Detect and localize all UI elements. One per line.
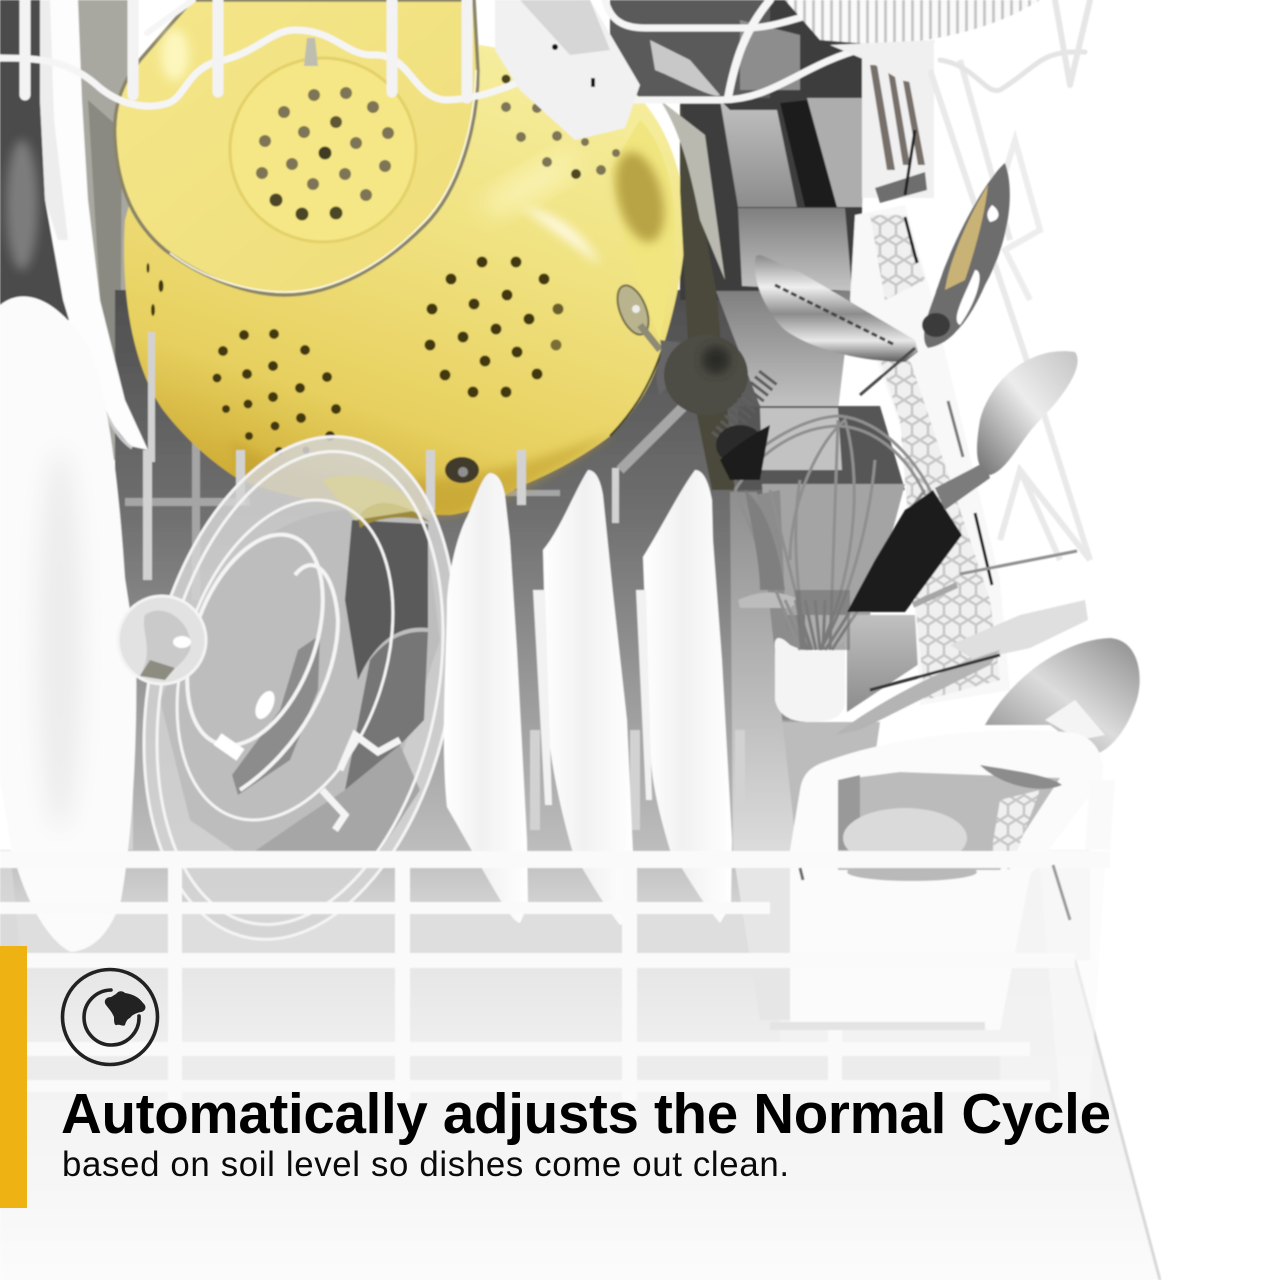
upper rack wavy wire (0, 30, 865, 106)
upper rack wires (0, 0, 1090, 106)
rack tines (125, 332, 745, 850)
dark cabinet interior (0, 0, 130, 460)
top right colander holes (501, 74, 620, 179)
upper rack right-hand wire (940, 52, 1085, 91)
basket top tines (785, 0, 1040, 85)
lid knob (118, 596, 206, 684)
upper rack vertical tines (25, 0, 585, 98)
ladle spoon (977, 351, 1078, 475)
rack floor (115, 290, 805, 851)
floor grid (125, 430, 560, 600)
spatula with black handle (720, 425, 990, 612)
slotted serving spoon (985, 638, 1140, 755)
tongs and flat utensils (835, 551, 1088, 735)
upper rack block (495, 0, 640, 140)
wire mesh side wall (850, 60, 1090, 705)
glass lid (100, 407, 500, 969)
peeler (755, 255, 918, 395)
whisk and white cup (732, 416, 938, 722)
heading: Automatically adjusts the Normal Cycle (61, 1082, 1111, 1145)
pot handle behind colander (620, 40, 770, 490)
dishwasher door base (0, 850, 1160, 1280)
lid swirls (100, 407, 500, 969)
lid reflection of colander (358, 503, 430, 528)
upper serving spoon (922, 163, 1010, 348)
large front plate (0, 296, 136, 952)
upper rack loop (605, 0, 810, 28)
cutlery basket (610, 0, 922, 1020)
lower colander holes (146, 256, 564, 455)
colander handle rivet (445, 281, 660, 483)
upper colander holes (256, 87, 394, 220)
lower rack wires (0, 780, 1115, 1101)
white handle basket (770, 730, 1103, 1030)
subheading: based on soil level so dishes come out clean. (62, 1145, 789, 1184)
three upright plates (444, 470, 732, 925)
accent bar (0, 946, 27, 1208)
dark reflection (345, 520, 428, 680)
upper colander (115, 0, 478, 295)
left tall plate (40, 0, 148, 450)
lower colander (124, 45, 686, 515)
forks (862, 48, 934, 203)
icon: soil sensor cycle (62, 970, 158, 1064)
